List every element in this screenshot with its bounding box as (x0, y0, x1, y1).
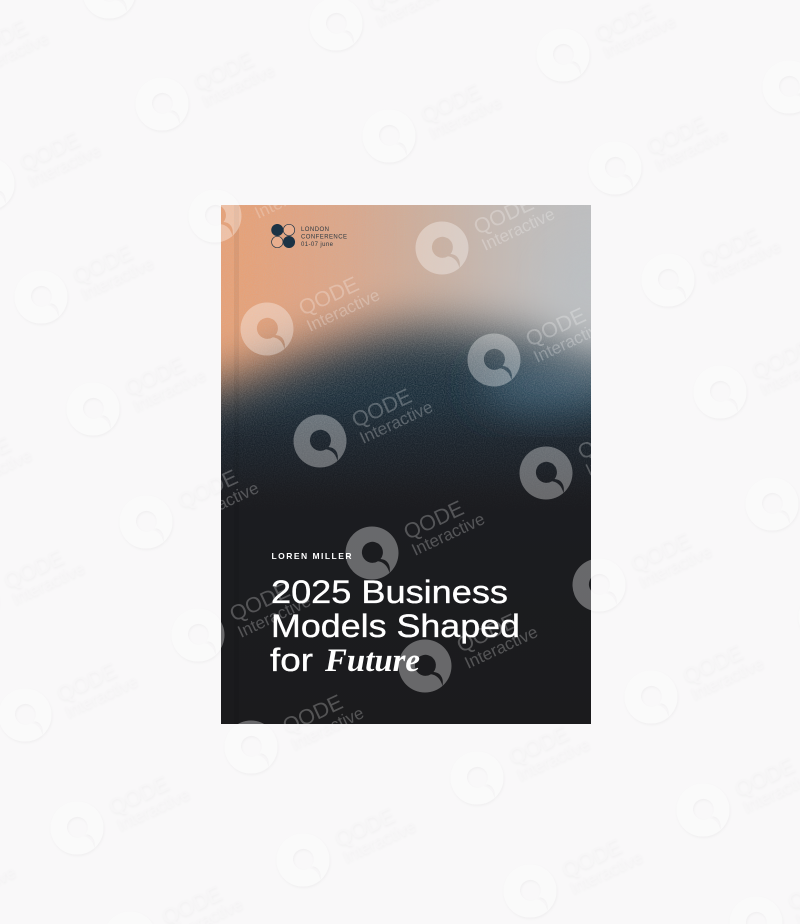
watermark (536, 0, 679, 82)
watermark (82, 0, 225, 18)
film grain (221, 205, 591, 488)
watermark: QODE (470, 191, 538, 240)
watermark: Interactive (567, 847, 646, 898)
watermark: Interactive (409, 509, 488, 560)
watermark: Interactive (479, 204, 558, 255)
watermark: Interactive (600, 11, 679, 62)
watermark: Interactive (288, 703, 367, 754)
watermark (276, 803, 419, 886)
book cover (221, 205, 591, 724)
watermark: Interactive (114, 784, 193, 835)
corner reinforcement: grey top-right (545, 240, 635, 330)
watermark (0, 127, 104, 210)
watermark: QODE (105, 771, 173, 820)
watermark: Interactive (288, 703, 367, 754)
watermark (642, 223, 784, 306)
watermark: QODE (53, 658, 121, 707)
watermark: Interactive (304, 285, 383, 336)
watermark (730, 866, 800, 924)
book title (270, 574, 520, 679)
watermark (294, 384, 436, 468)
watermark: Interactive (514, 734, 593, 785)
watermark (0, 432, 35, 516)
watermark: QODE (174, 465, 242, 514)
watermark (224, 690, 367, 774)
watermark: QODE (558, 834, 626, 883)
watermark: Interactive (652, 124, 731, 175)
watermark (520, 442, 591, 500)
watermark: QODE (121, 352, 189, 401)
conference text: CONFERENCE (301, 234, 347, 240)
teal glow on right (480, 359, 620, 411)
watermark (0, 15, 52, 99)
watermark (362, 79, 505, 162)
conference text: LONDON (301, 227, 329, 233)
watermark (0, 545, 88, 628)
watermark: Interactive (705, 236, 784, 287)
watermark: QODE (226, 578, 294, 627)
watermark (238, 694, 364, 724)
watermark: Interactive (426, 92, 505, 143)
watermark (50, 771, 193, 854)
watermark: QODE (69, 240, 137, 289)
watermark: QODE (331, 803, 399, 852)
watermark: Interactive (235, 591, 314, 642)
conference text: 01-07 june (301, 242, 334, 248)
four-circle mark (272, 224, 295, 248)
watermark (588, 111, 731, 194)
watermark (310, 0, 452, 51)
watermark (0, 658, 141, 742)
watermark: Interactive (688, 653, 767, 704)
book title: Models Shaped (271, 608, 520, 644)
watermark: QODE (627, 528, 695, 577)
watermark: QODE (295, 272, 363, 321)
watermark: QODE (0, 545, 68, 594)
watermark (221, 470, 258, 510)
watermark (798, 590, 800, 644)
watermark: QODE (679, 640, 747, 689)
watermark: Interactive (25, 140, 104, 191)
watermark (172, 608, 224, 662)
conference text (301, 227, 347, 248)
watermark (240, 272, 383, 356)
watermark: QODE (279, 690, 347, 739)
watermark (104, 881, 246, 924)
watermark: QODE (417, 79, 485, 128)
watermark (468, 308, 591, 386)
watermark (66, 352, 209, 436)
watermark: Interactive (78, 253, 157, 304)
watermark: Interactive (183, 478, 262, 529)
corner reinforcement: orange top-left (206, 175, 258, 335)
watermark overlay on book (221, 205, 591, 724)
watermark (346, 496, 488, 580)
watermark (572, 560, 591, 610)
watermark: Interactive (9, 558, 88, 609)
watermark: QODE (574, 416, 642, 465)
watermark: QODE (16, 127, 84, 176)
watermark: QODE (453, 609, 521, 658)
watermark: Interactive (531, 316, 610, 367)
watermark (14, 240, 157, 324)
watermark: Interactive (636, 541, 715, 592)
watermark: QODE (696, 223, 764, 272)
watermark (188, 190, 242, 242)
watermark (120, 465, 242, 548)
cover base gradient (221, 287, 591, 724)
watermark: QODE (174, 465, 242, 514)
watermark: QODE (731, 753, 799, 802)
watermark: Interactive (199, 60, 278, 111)
watermark: QODE (522, 303, 590, 352)
cover logo: London Conference (272, 224, 347, 248)
watermark: QODE (643, 111, 711, 160)
watermark (136, 47, 278, 131)
watermark: Interactive (62, 671, 141, 722)
watermark: QODE (348, 384, 416, 433)
watermark (221, 205, 286, 242)
book title: for (270, 642, 313, 678)
watermark (694, 335, 800, 418)
watermark (450, 721, 593, 804)
watermark: QODE (243, 159, 311, 208)
watermark: QODE (505, 721, 573, 770)
watermark (572, 528, 715, 612)
watermark (416, 205, 554, 274)
author name: LOREN MILLER (272, 551, 352, 561)
watermark: QODE (400, 496, 468, 545)
book title: Future (324, 643, 420, 679)
watermark (762, 60, 800, 114)
watermark: Interactive (357, 397, 436, 448)
light arc: orange to grey (221, 205, 591, 427)
spine groove (234, 228, 239, 372)
watermark: Interactive (583, 429, 662, 480)
watermark: QODE (279, 690, 347, 739)
watermark (398, 609, 541, 692)
watermark (624, 640, 767, 724)
watermark: Interactive (462, 622, 541, 673)
watermark (746, 447, 800, 530)
watermark (221, 583, 310, 648)
watermark: QODE (190, 47, 258, 96)
watermark (676, 753, 800, 836)
watermark: Interactive (340, 816, 419, 867)
watermark: Interactive (252, 172, 331, 223)
watermark: Interactive (130, 365, 209, 416)
book title: 2025 Business (271, 574, 508, 610)
watermark (504, 834, 646, 918)
